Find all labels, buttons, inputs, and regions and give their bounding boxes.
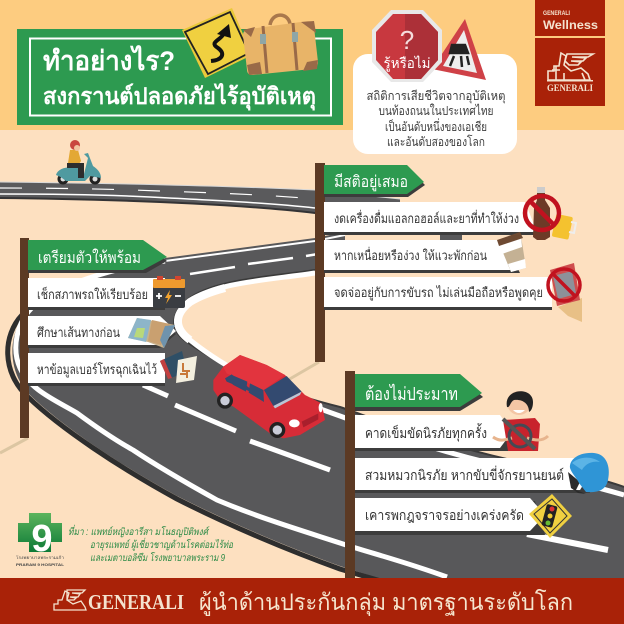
logo: Generali Wellness: Wellness (543, 18, 598, 32)
post (20, 238, 29, 438)
row: no phone (324, 277, 552, 310)
heading: careless: ต้องไม่ประมาท (365, 383, 458, 404)
row: no alcohol: งดเครื่องดื่มแอลกอฮอล์และยาที่ทำให้ง่วง (334, 210, 519, 226)
statistic text: บนท้องถนนในประเทศไทย (378, 104, 494, 118)
title line 1: ทำอย่างไร? (43, 45, 175, 76)
main winding road (8, 232, 624, 582)
stop sign (372, 10, 442, 82)
icon: motorcycle rider (56, 140, 101, 184)
post shadows (0, 362, 319, 453)
footer banner (0, 578, 624, 624)
row: traffic rules: เคารพกฎจราจรอย่างเคร่งครัด (365, 507, 524, 523)
title banner (17, 29, 343, 125)
heading: prepare (28, 240, 167, 273)
post (345, 371, 355, 578)
bubble (353, 54, 517, 154)
logo: Praram 9 hospital: 9 (31, 518, 53, 560)
row: no alcohol (324, 202, 537, 235)
sign post: always mindful (315, 163, 582, 362)
title line 2: สงกรานต์ปลอดภัยไร้อุบัติเหตุ (43, 82, 316, 111)
source credit (68, 524, 234, 564)
sign post: prepare (20, 238, 197, 438)
post (315, 163, 325, 362)
row: take a break: หากเหนื่อยหรือง่วง ให้แวะพักก่อน (334, 247, 487, 263)
warning triangle (432, 19, 486, 80)
logo: Praram 9 hospital: PRARAM 9 HOSPITAL (16, 562, 65, 567)
source credit: และเมตาบอลิซึม โรงพยาบาลพระราม 9 (90, 552, 225, 564)
statistic text: สถิติการเสียชีวิตจากอุบัติเหตุ (366, 89, 506, 104)
row: take a break (324, 240, 520, 273)
icon: winding road sign (182, 8, 252, 78)
icon: car battery (153, 276, 185, 308)
stop sign: ? (400, 25, 414, 55)
logo: Generali Wellness: GENERALI (543, 10, 570, 17)
icon: map (128, 318, 175, 348)
source credit: ที่มา : แพทย์หญิงอารีสา มโนธญปิติพงศ์ (68, 524, 210, 538)
icon: coffee cup (497, 232, 526, 272)
logo: Praram 9 hospital: โรงพยาบาลพระรามเก้า (16, 555, 64, 560)
row: emergency numbers (28, 353, 165, 386)
icon: suitcase (243, 15, 318, 75)
icon: no alcohol (525, 187, 576, 240)
row: check car (28, 278, 165, 310)
icon: red car (213, 355, 325, 438)
brand name: GENERALI (88, 590, 184, 614)
row: seat belt (355, 415, 512, 451)
heading: mindful (324, 165, 425, 197)
upper road strip (0, 182, 400, 218)
row: helmet: สวมหมวกนิรภัย หากขับขี่จักรยานยนต์ (365, 466, 564, 483)
icon: no phone (548, 263, 582, 322)
heading: prepare: เตรียมตัวให้พร้อม (38, 248, 141, 267)
sign post: do not be careless (345, 371, 609, 578)
row: traffic rules (355, 498, 545, 535)
logo: Generali lion: GENERALI (547, 84, 593, 94)
slogan: ผู้นำด้านประกันกลุ่ม มาตรฐานระดับโลก (199, 589, 573, 616)
row: emergency numbers: หาข้อมูลเบอร์โทรฉุกเฉินไว้ (37, 362, 157, 378)
statistic text: เป็นอันดับหนึ่งของเอเชีย (385, 118, 487, 134)
logo: Praram 9 hospital (16, 513, 65, 567)
row: helmet (355, 458, 590, 493)
heading: mindful: มีสติอยู่เสมอ (334, 173, 408, 192)
icon: traffic light sign (529, 494, 572, 538)
source credit: อายุรแพทย์ ผู้เชี่ยวชาญด้านโรคต่อมไร้ท่อ (90, 537, 234, 551)
statistic text: และอันดับสองของโลก (387, 134, 485, 149)
icon: driver with seat belt (493, 391, 548, 451)
row: study route (28, 316, 176, 348)
row: seat belt: คาดเข็มขัดนิรภัยทุกครั้ง (365, 423, 487, 442)
stop sign: รู้หรือไม่ (384, 55, 430, 72)
did you know panel (353, 10, 517, 154)
statistic text (366, 89, 506, 149)
row: no phone: จดจ่ออยู่กับการขับรถ ไม่เล่นมือถือหรือพูดคุย (334, 285, 543, 301)
logo: Generali lion (535, 38, 605, 106)
icon: phone book and map (160, 351, 197, 383)
heading: careless (355, 374, 483, 411)
icon: lion (54, 590, 86, 610)
row: check car: เช็กสภาพรถให้เรียบร้อย (37, 285, 148, 302)
logo: Generali Wellness (535, 0, 605, 36)
icon: helmet (568, 453, 609, 494)
row: study route: ศึกษาเส้นทางก่อน (37, 325, 120, 340)
